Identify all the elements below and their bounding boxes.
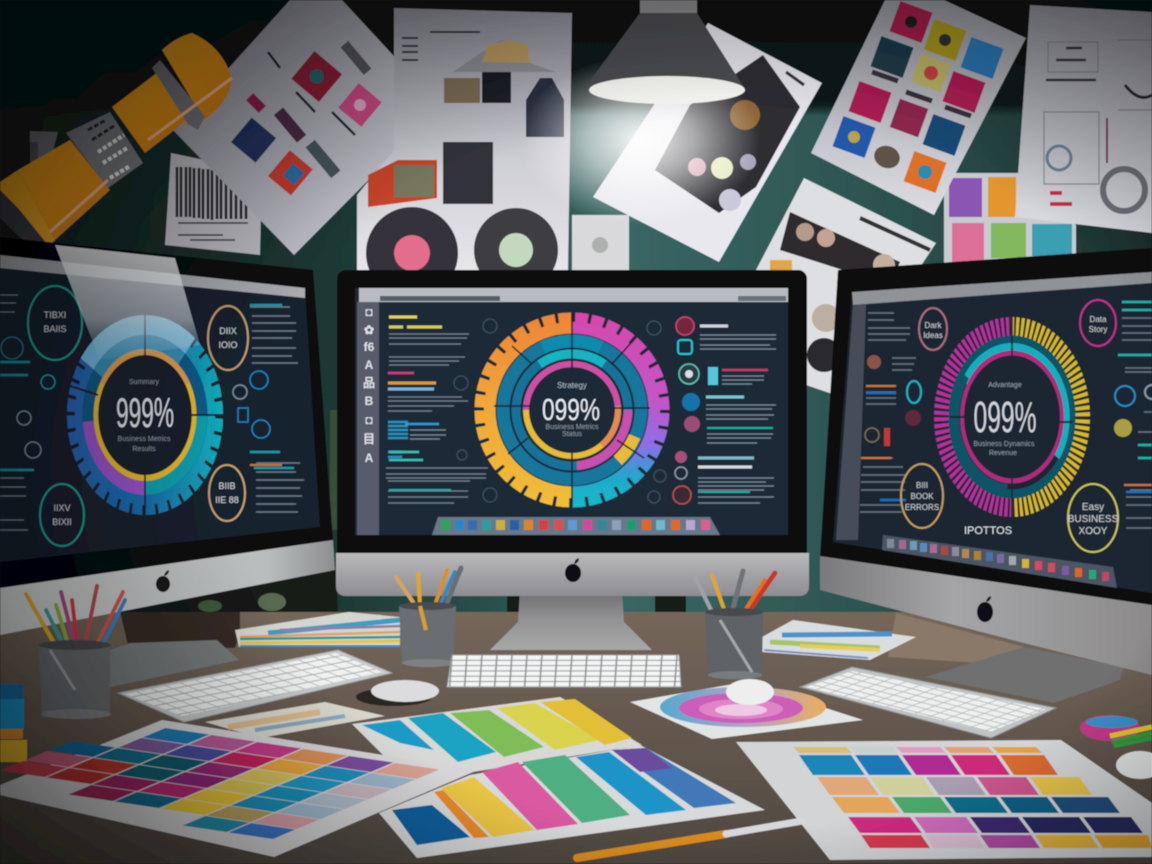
center monitor value: Strategy xyxy=(557,381,587,390)
center monitor stand xyxy=(490,590,652,650)
paper: colour tiles xyxy=(944,173,1076,267)
mouse on target xyxy=(726,679,774,705)
right monitor sidebar xyxy=(836,304,866,540)
center monitor xyxy=(336,270,809,650)
right monitor dock xyxy=(882,535,1117,588)
center monitor chin xyxy=(336,553,809,596)
right monitor: XOOY xyxy=(1079,526,1108,537)
right monitor circle callouts xyxy=(901,300,1118,552)
center monitor value: Status xyxy=(562,431,582,438)
left monitor toolbar xyxy=(0,255,305,298)
right monitor: BOOK xyxy=(910,492,934,501)
right monitor text lines xyxy=(860,313,1152,528)
colour target sheet xyxy=(630,679,863,739)
left monitor screen xyxy=(0,255,320,562)
center monitor sidebar xyxy=(357,302,379,535)
center monitor sidebar: 目 xyxy=(363,432,375,446)
paper: team photo leaflet xyxy=(756,178,936,400)
center monitor sidebar: 品 xyxy=(363,376,375,390)
left monitor text lines xyxy=(0,295,304,530)
second ring xyxy=(516,354,628,466)
left mouse xyxy=(356,680,439,706)
right monitor donut chart xyxy=(941,317,1083,517)
right monitor chin xyxy=(820,556,1152,675)
inner ring xyxy=(526,364,618,456)
paper: wireframe sheet xyxy=(1015,5,1152,233)
right keyboard xyxy=(800,667,1056,738)
center monitor value xyxy=(542,381,600,438)
center monitor sidebar: A xyxy=(365,358,374,372)
right monitor xyxy=(820,248,1152,703)
left monitor: DIIX xyxy=(219,326,237,336)
left monitor: IOIO xyxy=(218,340,238,350)
left monitor value xyxy=(116,379,174,453)
left monitor donut chart xyxy=(67,315,223,515)
left colour book stack xyxy=(0,684,27,762)
left monitor: TIBXI xyxy=(44,310,66,320)
colour sheet: bands upper xyxy=(352,697,642,782)
right monitor value xyxy=(964,382,1036,537)
paper: icon swatch sheet xyxy=(811,0,1026,215)
right monitor: BIII xyxy=(916,481,928,490)
left monitor value: 999% xyxy=(116,389,174,436)
right edge mouse xyxy=(1116,751,1152,779)
center monitor sidebar: A xyxy=(365,451,374,465)
right monitor: BUSINESS xyxy=(1068,514,1119,525)
center monitor screen xyxy=(355,288,788,535)
right monitor: Data xyxy=(1090,315,1107,324)
swatch stack: back right xyxy=(762,620,916,660)
left monitor value: Results xyxy=(132,446,156,453)
lamp light glow xyxy=(520,55,760,225)
right monitor: ERRORS xyxy=(905,503,939,512)
paper: collage poster with discs xyxy=(357,8,572,300)
right monitor logo xyxy=(977,596,993,622)
center monitor faint icons xyxy=(454,319,666,503)
swatch stack: back left xyxy=(235,612,400,647)
center monitor sidebar: f6 xyxy=(364,340,375,354)
left monitor circle callouts xyxy=(28,286,248,546)
dark gap behind desk with plants xyxy=(90,410,686,612)
left monitor icons xyxy=(1,337,270,458)
right monitor value: IPOTTOS xyxy=(964,525,1012,537)
center monitor dock xyxy=(432,517,720,535)
middle ring xyxy=(503,341,641,479)
paper: barcode sheet xyxy=(165,153,262,255)
left monitor stand xyxy=(110,640,239,687)
right monitor toolbar xyxy=(852,272,1152,305)
left monitor logo xyxy=(156,570,170,592)
left monitor bezel xyxy=(0,237,333,590)
center keyboard xyxy=(447,655,681,687)
left monitor: IIXV xyxy=(53,503,71,513)
left monitor value: Summary xyxy=(129,379,159,386)
left monitor value: Business Metrics xyxy=(118,436,171,443)
colour sheet: bands lower xyxy=(379,745,765,858)
disc charts xyxy=(357,207,572,300)
center monitor bezel xyxy=(337,270,807,560)
right monitor: Easy xyxy=(1082,502,1104,513)
center monitor sidebar: ◘ xyxy=(365,413,373,427)
center monitor value: Business Metrics xyxy=(546,424,599,431)
center monitor toolbar xyxy=(359,288,788,302)
paper: small sheet at far left xyxy=(0,130,58,230)
outer ring left half xyxy=(485,323,572,497)
small swatch under big sheet xyxy=(205,702,385,738)
colour sheet: big grid xyxy=(0,720,478,857)
right monitor value: Revenue xyxy=(989,450,1017,457)
right monitor screen xyxy=(833,272,1152,593)
wall background xyxy=(0,0,1152,640)
center monitor sidebar: ◘ xyxy=(365,305,373,319)
center monitor logo xyxy=(565,558,581,582)
left monitor: BIXII xyxy=(52,517,72,527)
right monitor icons xyxy=(865,355,1152,446)
right pencil cup xyxy=(694,571,775,679)
desk xyxy=(0,612,1152,864)
right monitor stand xyxy=(925,647,1124,703)
paper: small white note xyxy=(572,215,629,271)
center monitor donut chart xyxy=(479,313,665,507)
right monitor bezel xyxy=(820,248,1152,605)
left pencil cup xyxy=(26,586,125,719)
outer ring teeth xyxy=(479,317,665,503)
left monitor: BIIB xyxy=(218,481,236,491)
pencil on desk xyxy=(577,821,802,858)
yellow tube xyxy=(0,33,232,262)
lamp xyxy=(589,0,745,104)
left monitor xyxy=(0,237,335,687)
colour sheet: right grid xyxy=(736,740,1152,860)
left monitor: BAIIS xyxy=(43,324,67,334)
left monitor: IIE 88 xyxy=(215,495,239,505)
right monitor: Ideas xyxy=(923,331,943,340)
left keyboard xyxy=(118,650,392,722)
right monitor: Dark xyxy=(925,321,942,330)
paper: dark photo sheet under the lamp xyxy=(593,23,822,262)
right monitor value: 099% xyxy=(974,393,1036,442)
left monitor chin xyxy=(0,540,335,635)
rainbow eraser xyxy=(1080,715,1152,746)
right monitor value: Business Dynamics xyxy=(973,441,1035,448)
center monitor right column xyxy=(673,317,776,504)
center monitor value: 099% xyxy=(542,392,600,427)
outer ring right half xyxy=(572,323,659,497)
paper: tilted catalogue sheet xyxy=(173,0,441,255)
right monitor: Story xyxy=(1089,325,1107,334)
center monitor sidebar: ✿ xyxy=(364,323,374,337)
center monitor left column text xyxy=(386,317,488,503)
center pencil cup xyxy=(396,568,461,667)
right monitor value: Advantage xyxy=(988,382,1022,389)
left monitor translucent sheet xyxy=(55,245,200,360)
center monitor sidebar: B xyxy=(365,394,374,408)
